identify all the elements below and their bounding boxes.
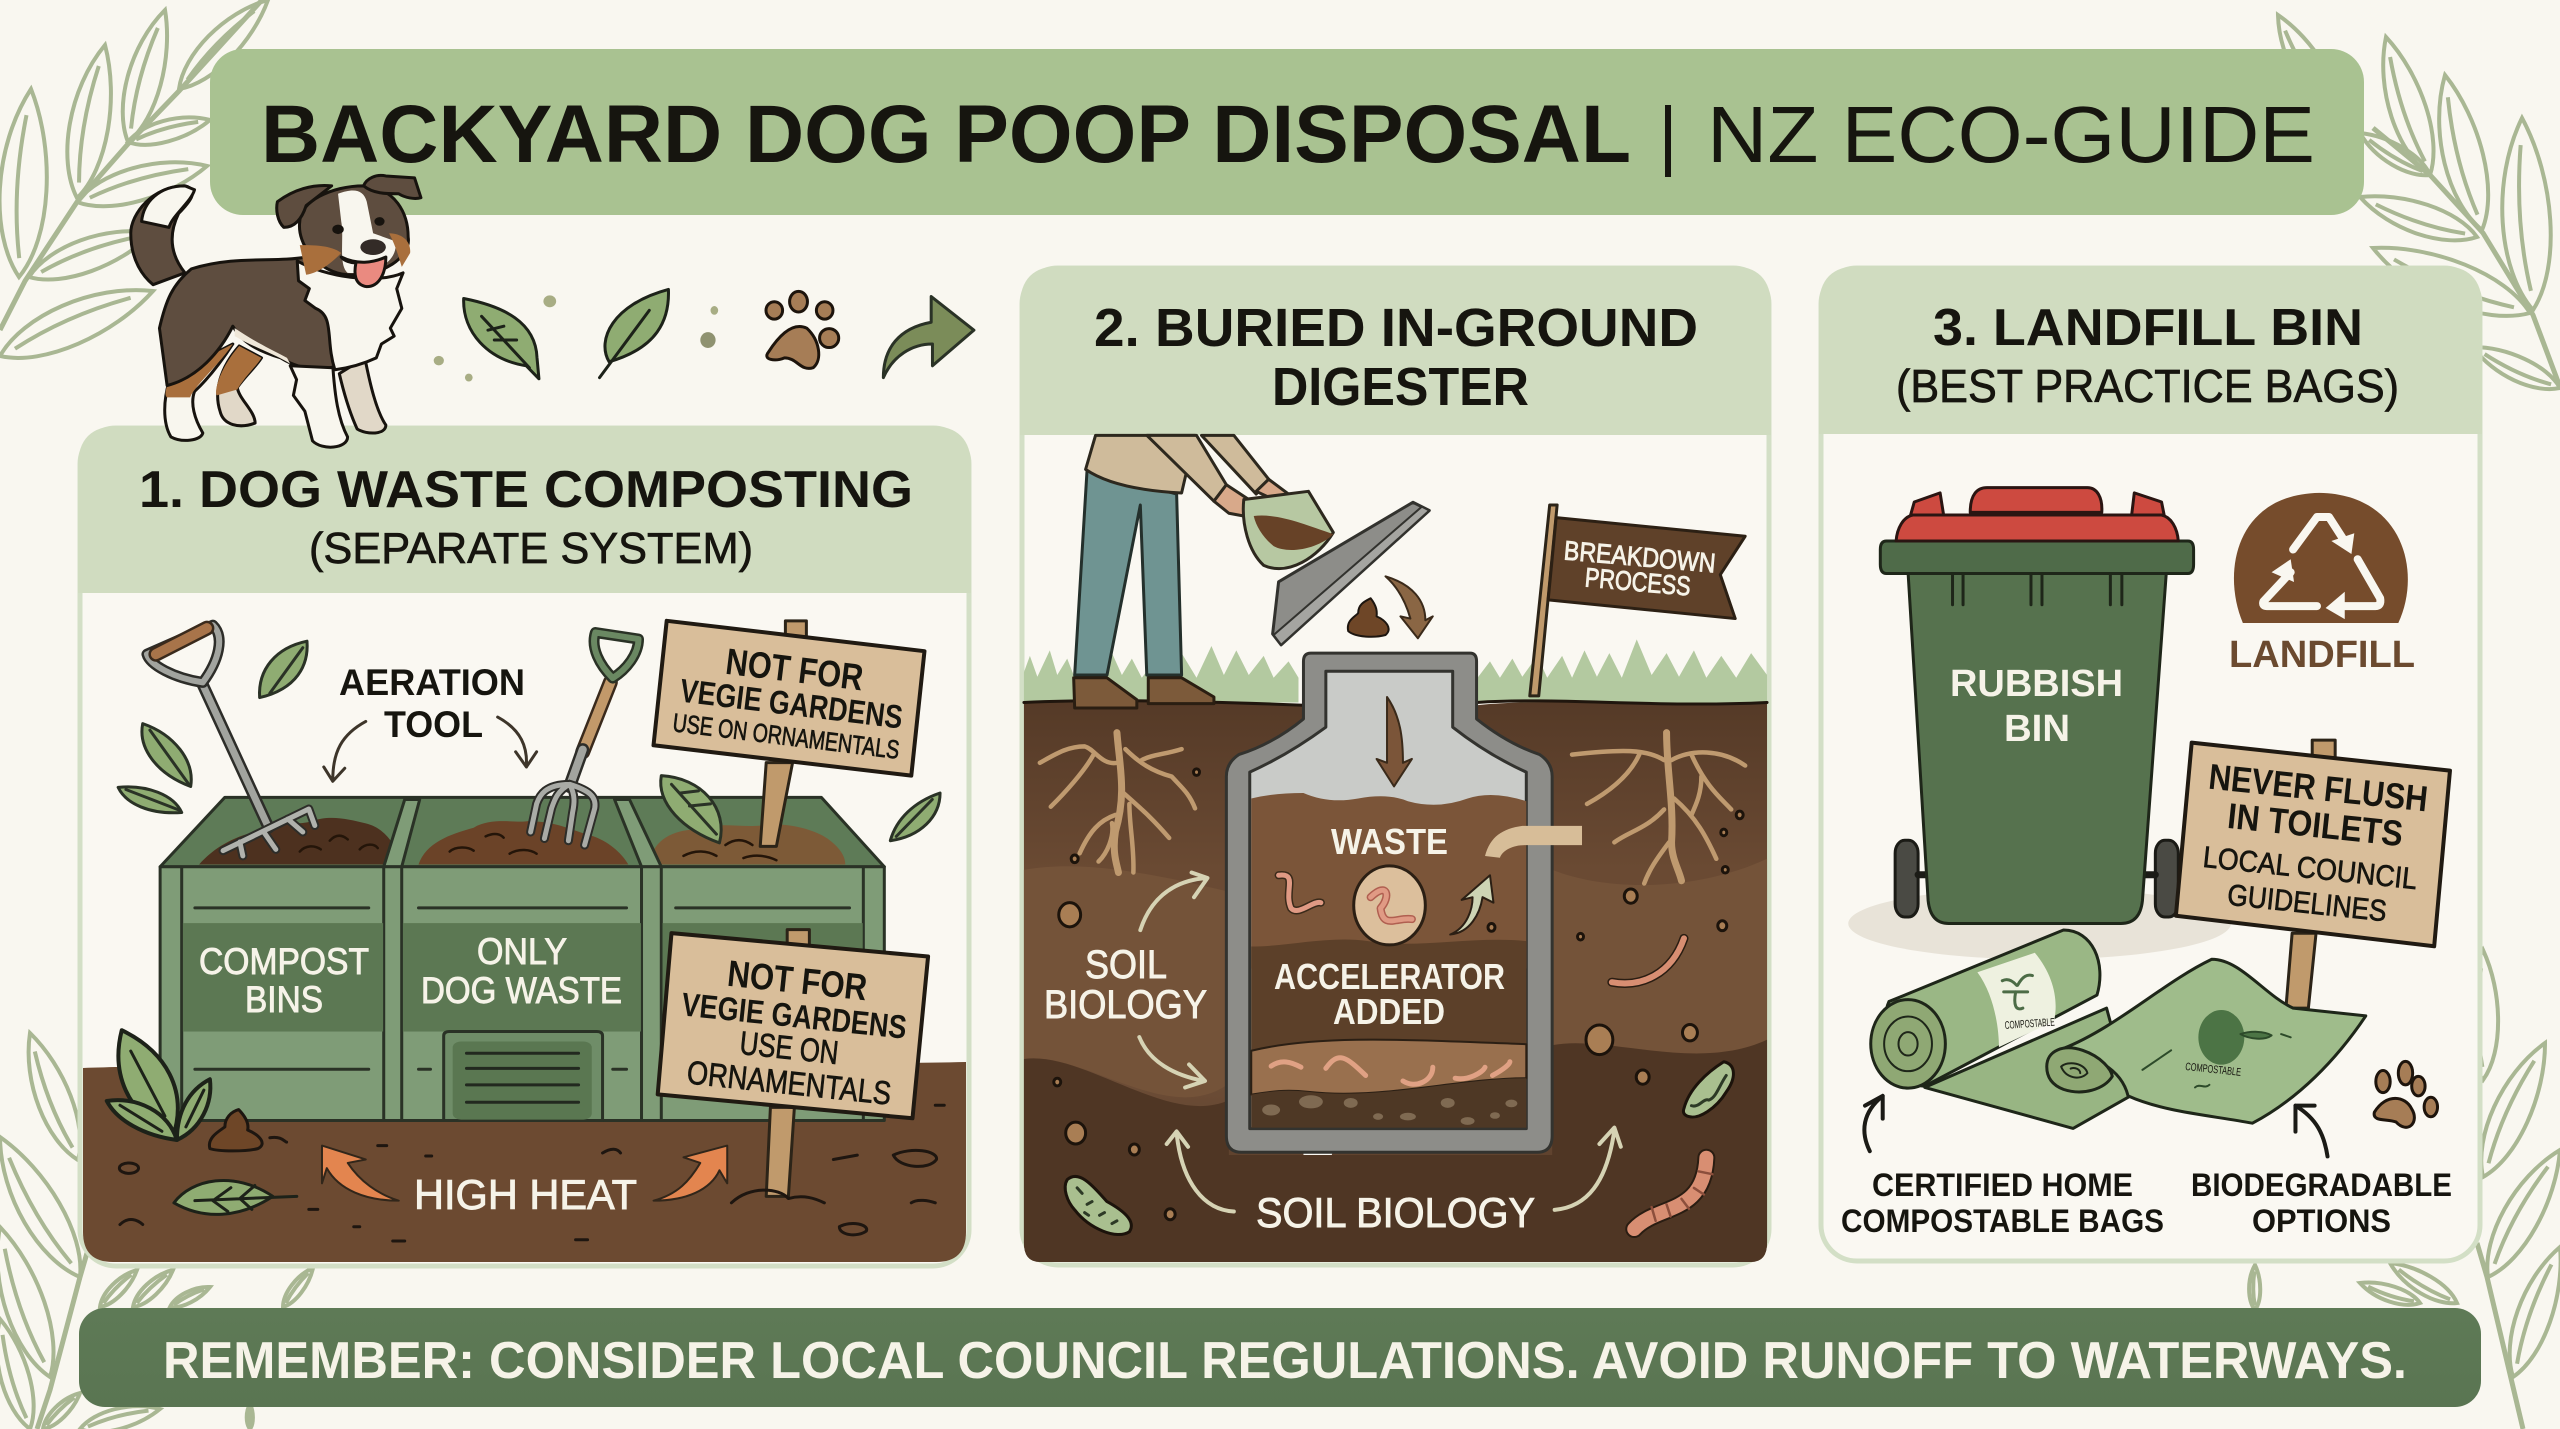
plant at bin base [107,1030,210,1140]
icon: arrow [883,297,974,378]
compost bins illustration [107,621,944,1241]
label: waste: WASTE [1331,821,1448,862]
red lid [1896,515,2178,541]
label: soil: SOIL [1085,943,1167,987]
sign text: IN TOILETS [2226,795,2405,854]
sign post [2286,740,2335,1008]
outlet pipe [1485,826,1582,858]
soil biology pebbles [1054,769,1743,1220]
panel 2 heading line 1: 2. BURIED IN-GROUND [1094,298,1698,358]
soil clods [119,1105,944,1241]
bag arrows [1864,1096,2328,1156]
aeration rake [203,685,269,828]
bacterium lower left [1065,1176,1131,1235]
decorative dots [434,295,718,382]
flag text: PROCESS [1584,562,1692,602]
decorative botanical branch: bottom left [0,1027,318,1429]
roots right [1572,733,1745,883]
dog tail [131,186,193,285]
grass [1024,639,1767,702]
dog eyes [332,225,344,234]
tail tip [142,186,195,227]
bin wheels [1895,840,1918,917]
large bag roll body [1885,930,2100,1086]
icon: leaf 2 [600,289,668,378]
roll label [1977,953,2056,1047]
panel 1 header band [78,426,971,593]
roots left [1040,733,1195,873]
label: aeration tool: AERATION [339,662,525,703]
caption: biodegradable options: OPTIONS [2252,1203,2391,1239]
sign 2 text: NOT FOR [726,953,869,1008]
aeration fork [583,682,610,752]
tank lid [1273,502,1429,645]
leaf on ground [174,1180,297,1214]
flag text: BREAKDOWN [1563,535,1717,579]
soil ground [83,1062,966,1262]
label: soil biology bottom: SOIL BIOLOGY [1256,1189,1535,1236]
heat arrow left [322,1146,399,1201]
person torso [1086,435,1195,493]
head tan cheek [300,233,410,275]
soil layers [1024,702,1767,1262]
front legs [290,366,348,447]
panel 1: dog waste composting [78,426,971,1266]
heat arrow right [654,1146,727,1201]
worms in band [1271,1058,1510,1084]
light arrow in tank [1450,875,1493,934]
bin body [1908,572,2166,924]
label: tool: TOOL [384,704,483,745]
caption: biodegradable options [2191,1167,2452,1239]
worm band [1251,1040,1526,1095]
down arrow inside tank [1377,697,1412,786]
caption: biodegradable options: BIODEGRADABLE [2191,1167,2452,1203]
title bar [210,49,2364,215]
earthworm upper right [1612,938,1684,983]
panel 2 heading line 2: DIGESTER [1272,357,1529,417]
decorative botanical branch: top left [0,0,278,374]
bin vent door [444,1032,603,1120]
subtitle text: NZ ECO-GUIDE [1707,90,2315,179]
landfill illustration [1848,488,2450,1156]
label: compost: COMPOST [199,941,369,982]
dog mascot [131,175,421,447]
label: bin: BIN [2004,708,2070,750]
label: only: ONLY [477,931,567,972]
dog body [159,257,338,386]
waste layer [1251,793,1526,969]
dog nose [360,239,386,255]
caption: certified home compostable bags [1841,1167,2164,1239]
sign board [2176,743,2450,946]
bin ribs [1953,574,2122,605]
earthworm lower right [1634,1158,1706,1229]
sign text: GUIDELINES [2226,879,2388,928]
icon: paw [766,291,839,368]
bacterium right [1683,1062,1733,1117]
person far arm [1201,435,1269,494]
label: dog waste: DOG WASTE [421,970,622,1011]
compost mounds [199,818,402,865]
decorative botanical branch: top right [2264,8,2560,399]
gravel layer [1251,1078,1526,1128]
recycle triangle [2263,517,2380,619]
sign text [2201,756,2430,928]
sign 2 text: USE ON [738,1024,840,1071]
sign 1 text: USE ON ORNAMENTALS [671,707,901,765]
flag text [1563,535,1717,602]
decorative icons row [434,289,974,382]
aeration arrows [324,717,537,781]
panel 3: landfill bin [1819,266,2482,1261]
person hands [1214,479,1289,516]
panel 3 heading: 3. LANDFILL BIN [1933,299,2363,357]
panel 3 subheading: (BEST PRACTICE BAGS) [1896,360,2399,412]
person near arm [1147,435,1226,501]
label: biology: BIOLOGY [1044,983,1207,1027]
digester illustration [1024,435,1767,1262]
dog chest [297,261,403,370]
icon: leaf 1 [464,299,539,379]
sign board 1 [654,621,924,776]
red lid handles [1909,488,2165,519]
accelerator layer [1251,940,1526,1051]
falling arrow [1386,576,1433,638]
sheet logo [2142,1010,2291,1087]
bin interior [160,797,884,867]
head white blaze [338,191,396,273]
rear legs [218,346,261,426]
worm in tank [1279,875,1321,910]
paw print [2374,1061,2438,1127]
bottom reminder bar [79,1308,2481,1407]
title text: BACKYARD DOG POOP DISPOSAL [261,89,1631,180]
flag [1530,505,1557,696]
dog mouth and tongue [341,257,386,287]
sign 2 text: ORNAMENTALS [685,1053,893,1112]
caption: certified home compostable bags: COMPOSTABLE BAGS [1841,1203,2164,1239]
label: accelerator: ACCELERATOR [1274,956,1505,997]
panel 2: buried in-ground digester [1020,266,1771,1265]
label: high heat: HIGH HEAT [414,1171,637,1218]
sign 2 text [680,953,909,1112]
flat bag sheet [1925,1008,2130,1128]
bin front [160,867,884,1120]
accelerator capsule [1354,866,1425,945]
sign 1 text: VEGIE GARDENS [678,672,905,736]
reminder text: REMEMBER: CONSIDER LOCAL COUNCIL REGULATIONS. AVOID RUNOFF TO WATERWAYS. [163,1332,2407,1390]
wider bag sheet [2063,959,2366,1123]
label: bins: BINS [245,979,323,1020]
sign text: LOCAL COUNCIL [2201,841,2419,896]
sign post 2 upper [787,930,809,947]
label: added: ADDED [1333,991,1445,1032]
left ear [277,185,332,227]
bag with waste [1243,491,1333,569]
sign post 1 [760,621,806,846]
person shoes [1074,678,1214,708]
label: rubbish: RUBBISH [1950,663,2123,705]
right ear [364,175,421,198]
sign post 2 lower [766,1107,794,1196]
tank interior air [1250,671,1526,1129]
sheet small text: COMPOSTABLE [2185,1061,2242,1079]
person legs [1075,469,1182,675]
bag small roll [2047,1048,2112,1092]
bin dividers [384,800,661,867]
sign 1 text: NOT FOR [724,641,866,698]
poop pile [209,1110,262,1151]
caption: certified home compostable bags: CERTIFIED HOME [1872,1167,2133,1203]
belly white [235,328,290,364]
sign 2 text: VEGIE GARDENS [680,985,909,1046]
label: landfill: LANDFILL [2229,634,2415,676]
panel 3 header band [1819,266,2482,434]
panel 1 heading: 1. DOG WASTE COMPOSTING [139,461,913,519]
title divider [1665,105,1671,177]
sign 1 text [671,641,905,765]
sign board 2 [658,933,928,1118]
bin rim [1880,541,2194,574]
roll label small text: COMPOSTABLE [2004,1017,2055,1032]
panel 2 header band [1020,266,1771,435]
decorative leaves around bins [118,641,940,843]
bin shadow [1848,888,2231,959]
dog head [299,186,408,275]
decorative botanical branch: bottom right [2249,950,2560,1429]
dropped poop [1348,598,1389,637]
roll icon [2002,975,2032,1009]
large roll end [1871,1000,1945,1088]
digester tank shell [1226,653,1552,1152]
soil biology arrows [1139,873,1621,1211]
panel 1 subheading: (SEPARATE SYSTEM) [309,524,753,573]
sign text: NEVER FLUSH [2207,756,2430,819]
landfill badge [2234,493,2408,623]
